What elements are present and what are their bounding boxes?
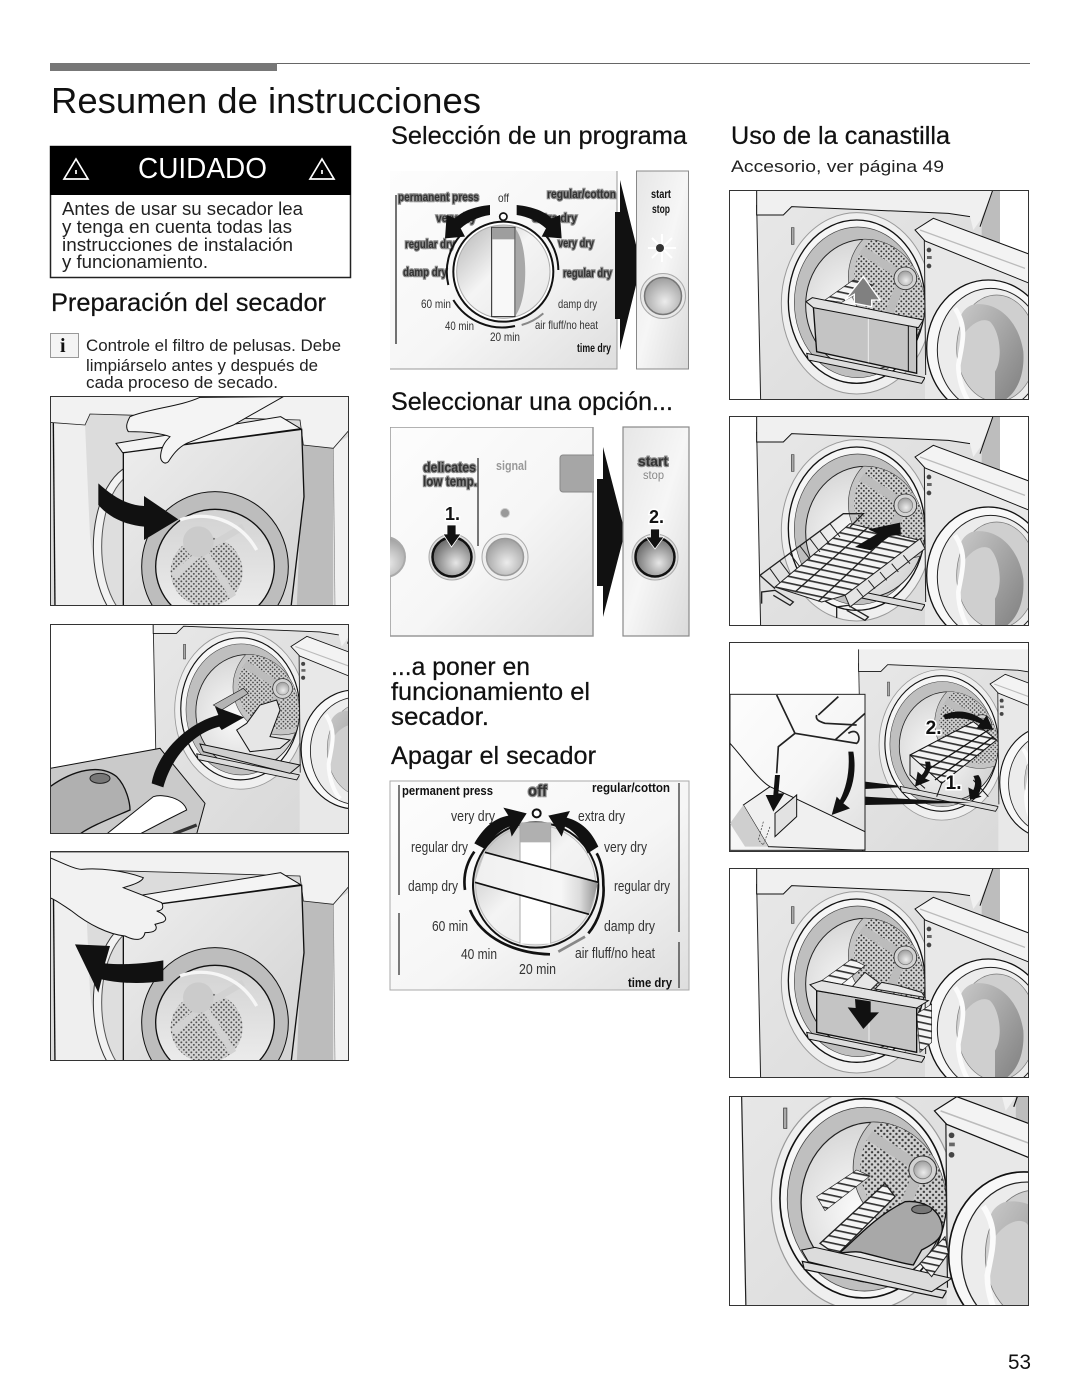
start label: stop (643, 468, 664, 482)
icon: hand on door (127, 397, 283, 463)
info text: Controle el filtro de pelusas. Debe (86, 337, 341, 355)
heading: program selection: Selección de un programa (391, 122, 687, 150)
top rule (50, 63, 1030, 71)
option labels: signal (496, 458, 527, 473)
illustration: shoe on rack (729, 1096, 1029, 1306)
off dial labels: very dry (451, 808, 495, 825)
option labels: low temp. (423, 473, 477, 489)
off dial labels: regular dry (411, 839, 468, 856)
right fence (917, 1004, 932, 1052)
off dial labels: 60 min (432, 918, 468, 935)
rack shelf (822, 959, 865, 986)
off dial labels: permanent press (402, 783, 493, 798)
off dial labels: damp dry (604, 918, 655, 935)
off dial labels: very dry (604, 839, 647, 856)
start label: start (638, 453, 668, 469)
start stop label: stop (652, 204, 670, 216)
off dial labels: regular/cotton (592, 780, 670, 795)
arrows to off position (474, 808, 598, 853)
dial labels: 40 min (445, 319, 474, 333)
option labels: delicates (423, 459, 476, 475)
dial labels: regular dry (405, 237, 455, 251)
start stop label: start (651, 189, 671, 201)
caution header bar (50, 146, 351, 195)
step labels (926, 718, 962, 794)
heading: preparation: Preparación del secador (51, 289, 326, 317)
led (500, 508, 510, 518)
step labels: 2. (926, 718, 942, 739)
heading: rack use: Uso de la canastilla (731, 122, 950, 150)
wire guard (852, 972, 925, 997)
dial labels: very dry (436, 211, 476, 225)
dial labels: very dry (558, 236, 594, 250)
icon: warning triangle right (310, 159, 334, 179)
arrows around knob (445, 205, 562, 238)
option labels (423, 458, 527, 489)
dial labels: regular dry (563, 266, 612, 280)
caution text: y tenga en cuenta todas las (62, 217, 292, 237)
filter rim (200, 744, 300, 773)
shelf inside drum (213, 688, 248, 710)
step 1 marker: 1. (445, 504, 460, 524)
dial labels: time dry (577, 343, 611, 355)
start button (640, 274, 686, 318)
illustration: remove filter basket (729, 190, 1029, 400)
rim (802, 1247, 952, 1292)
illustration: loading laundry (50, 624, 349, 834)
dial labels: damp dry (403, 265, 447, 279)
icon: info box (50, 334, 78, 358)
heading: start the dryer (391, 653, 590, 731)
off dial labels: extra dry (578, 808, 625, 825)
arrows: hook in and turn (915, 711, 993, 800)
button left partial (365, 537, 405, 577)
panel: start button (623, 427, 689, 636)
heading: turn off: Apagar el secador (391, 742, 596, 770)
dial labels: permanent press (398, 190, 479, 204)
icon: info box: i (60, 335, 66, 357)
clothes in drum (237, 700, 290, 752)
laundry basket (50, 748, 205, 834)
off dial labels: air fluff/no heat (575, 945, 656, 962)
icon: hand pushing door (50, 858, 166, 939)
off dial labels: off (528, 783, 548, 800)
panel: start stop (636, 171, 688, 369)
off dial labels: regular dry (614, 878, 670, 895)
step 2 marker: 2. (649, 507, 664, 527)
caution text (62, 199, 304, 272)
arrow: lift up (845, 277, 880, 307)
step 1 marker (443, 504, 461, 547)
dial knob (447, 213, 558, 327)
arrow: to start (597, 447, 625, 617)
illustration: insert rack (729, 416, 1029, 626)
info text: limpiárselo antes y después de (86, 357, 318, 375)
panel: off dial (390, 780, 689, 990)
icon: warning triangle left (64, 159, 88, 179)
icon: lit led (648, 234, 676, 262)
off dial labels: damp dry (408, 878, 458, 895)
panel: option buttons (390, 427, 594, 637)
start button pressed (632, 534, 678, 580)
accessory reference: Accesorio, ver página 49 (731, 158, 944, 176)
off dial labels: time dry (628, 975, 673, 990)
caution heading: CUIDADO (138, 153, 267, 185)
page number: 53 (1008, 1351, 1031, 1374)
right fence (920, 1237, 948, 1277)
step labels: 1. (946, 773, 962, 794)
off dial labels: 20 min (519, 961, 556, 978)
panel: caution box (50, 146, 351, 278)
shoe opening (912, 1205, 932, 1214)
delicates button (429, 534, 475, 580)
display window (560, 455, 596, 492)
dial labels: damp dry (558, 297, 597, 311)
wire rack (760, 514, 925, 620)
arrow: door closes (75, 944, 163, 993)
info text: cada proceso de secado. (86, 374, 278, 392)
dial labels: 20 min (490, 330, 520, 344)
connector wedges (865, 782, 972, 805)
arrow: into drum (152, 707, 244, 787)
caution text: instrucciones de instalación (62, 235, 293, 255)
dial labels: 60 min (421, 297, 451, 311)
caution text: y funcionamiento. (62, 252, 208, 272)
heading: start the dryer: ...a poner en (391, 653, 530, 681)
start stop label (651, 189, 671, 216)
heading: select option: Seleccionar una opción... (391, 388, 673, 416)
dial labels: air fluff/no heat (535, 318, 599, 332)
arrow: door opens (98, 483, 178, 540)
wire rack (910, 722, 997, 797)
inset detail (730, 694, 865, 850)
panel: program dial (390, 171, 617, 369)
illustration: opening the door (50, 396, 349, 606)
icon: shoe (840, 1201, 942, 1265)
signal button (482, 534, 528, 580)
heading: start the dryer: secador. (391, 703, 489, 731)
illustration: closing the door (50, 851, 349, 1061)
illustration: hook rack with inset (729, 642, 1029, 852)
arrow: to start button (615, 180, 641, 350)
title: Resumen de instrucciones (51, 80, 481, 121)
caution text: Antes de usar su secador lea (62, 199, 304, 219)
dial labels (398, 187, 616, 355)
rack shelf (817, 1170, 870, 1211)
dial labels: regular/cotton (547, 187, 616, 201)
info text (86, 337, 341, 392)
arrow: lower down (848, 999, 879, 1029)
illustration: place basket on rack (729, 868, 1029, 1078)
heading: start the dryer: funcionamiento el (391, 678, 590, 706)
filter basket (806, 280, 923, 373)
off dial labels (402, 780, 673, 990)
off dial knob (464, 809, 604, 954)
arrow: slide in (855, 523, 901, 550)
start label (638, 453, 668, 482)
dial labels: extra dry (532, 211, 577, 225)
filter basket (810, 981, 928, 1052)
dial labels: off (498, 191, 510, 205)
wire rack fence (820, 1183, 895, 1255)
step 2 marker (646, 507, 664, 549)
off dial labels: 40 min (461, 946, 497, 963)
